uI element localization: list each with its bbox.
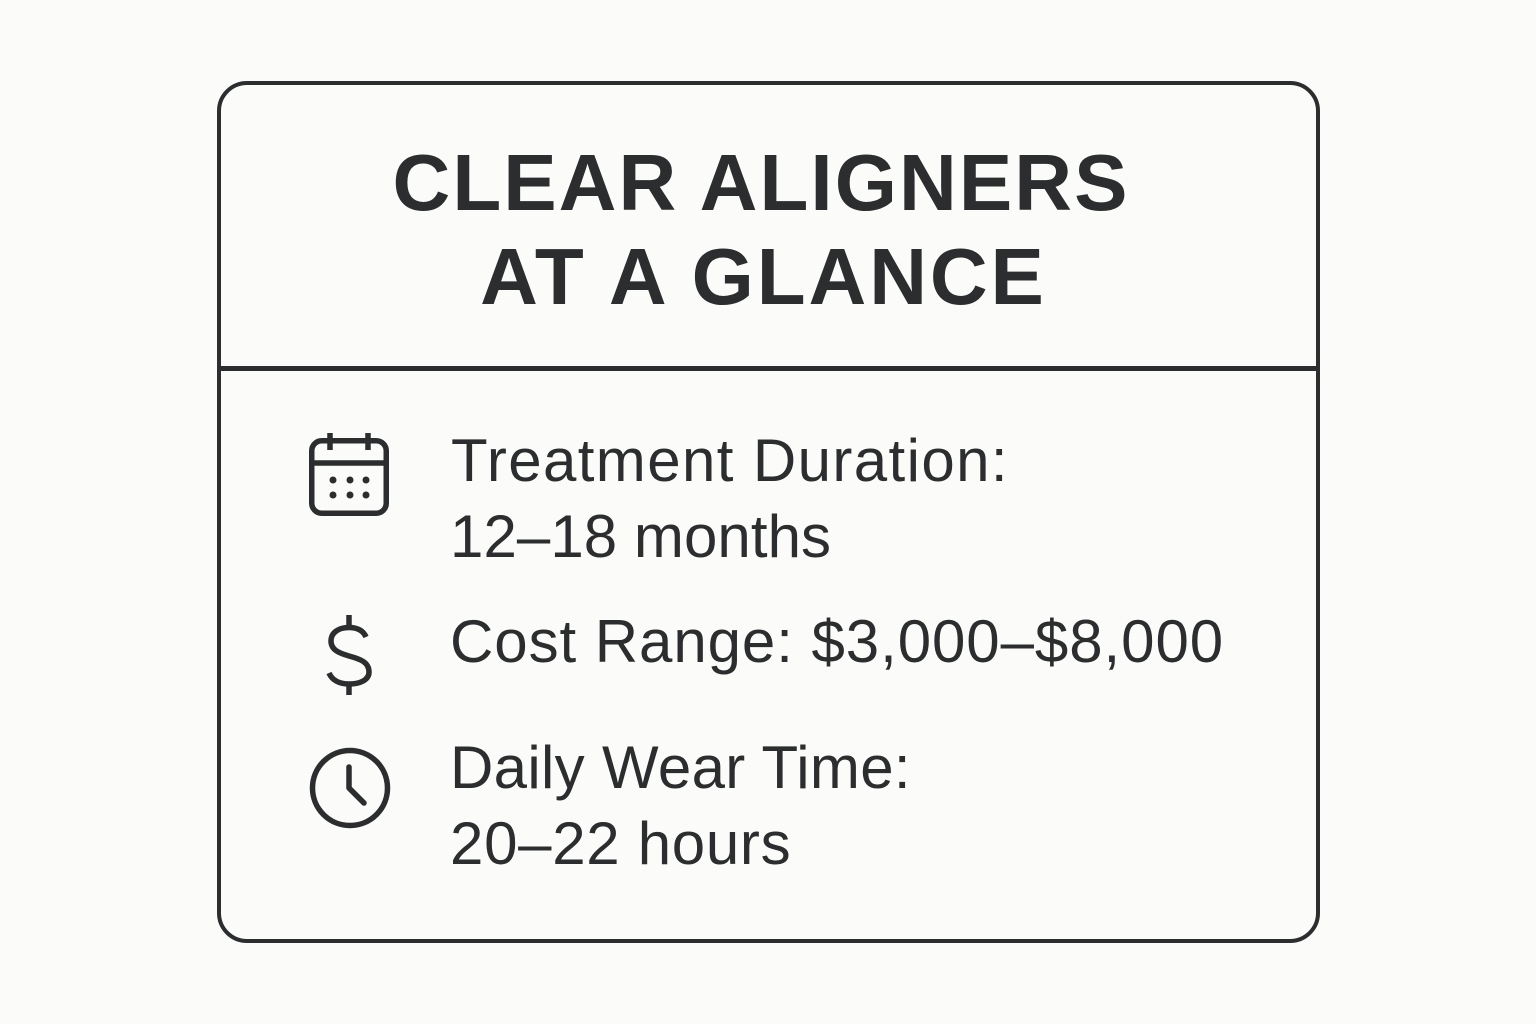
text: treatment duration: Treatment Duration:	[451, 427, 1009, 494]
text: treatment duration: 12–18 months	[450, 503, 831, 570]
icon: clock	[310, 748, 390, 828]
title	[392, 138, 1130, 321]
icon: calendar	[309, 433, 389, 516]
text: daily wear time: 20–22 hours	[450, 810, 791, 877]
text: daily wear time	[450, 734, 911, 877]
icon: dollar	[326, 615, 372, 695]
text: treatment duration	[450, 427, 1009, 570]
text: daily wear time: Daily Wear Time:	[450, 734, 911, 801]
text: cost range: Cost Range: $3,000–$8,000	[450, 608, 1224, 675]
title: AT A GLANCE	[480, 232, 1047, 321]
panel: card	[217, 81, 1320, 943]
title: CLEAR ALIGNERS	[392, 138, 1130, 227]
